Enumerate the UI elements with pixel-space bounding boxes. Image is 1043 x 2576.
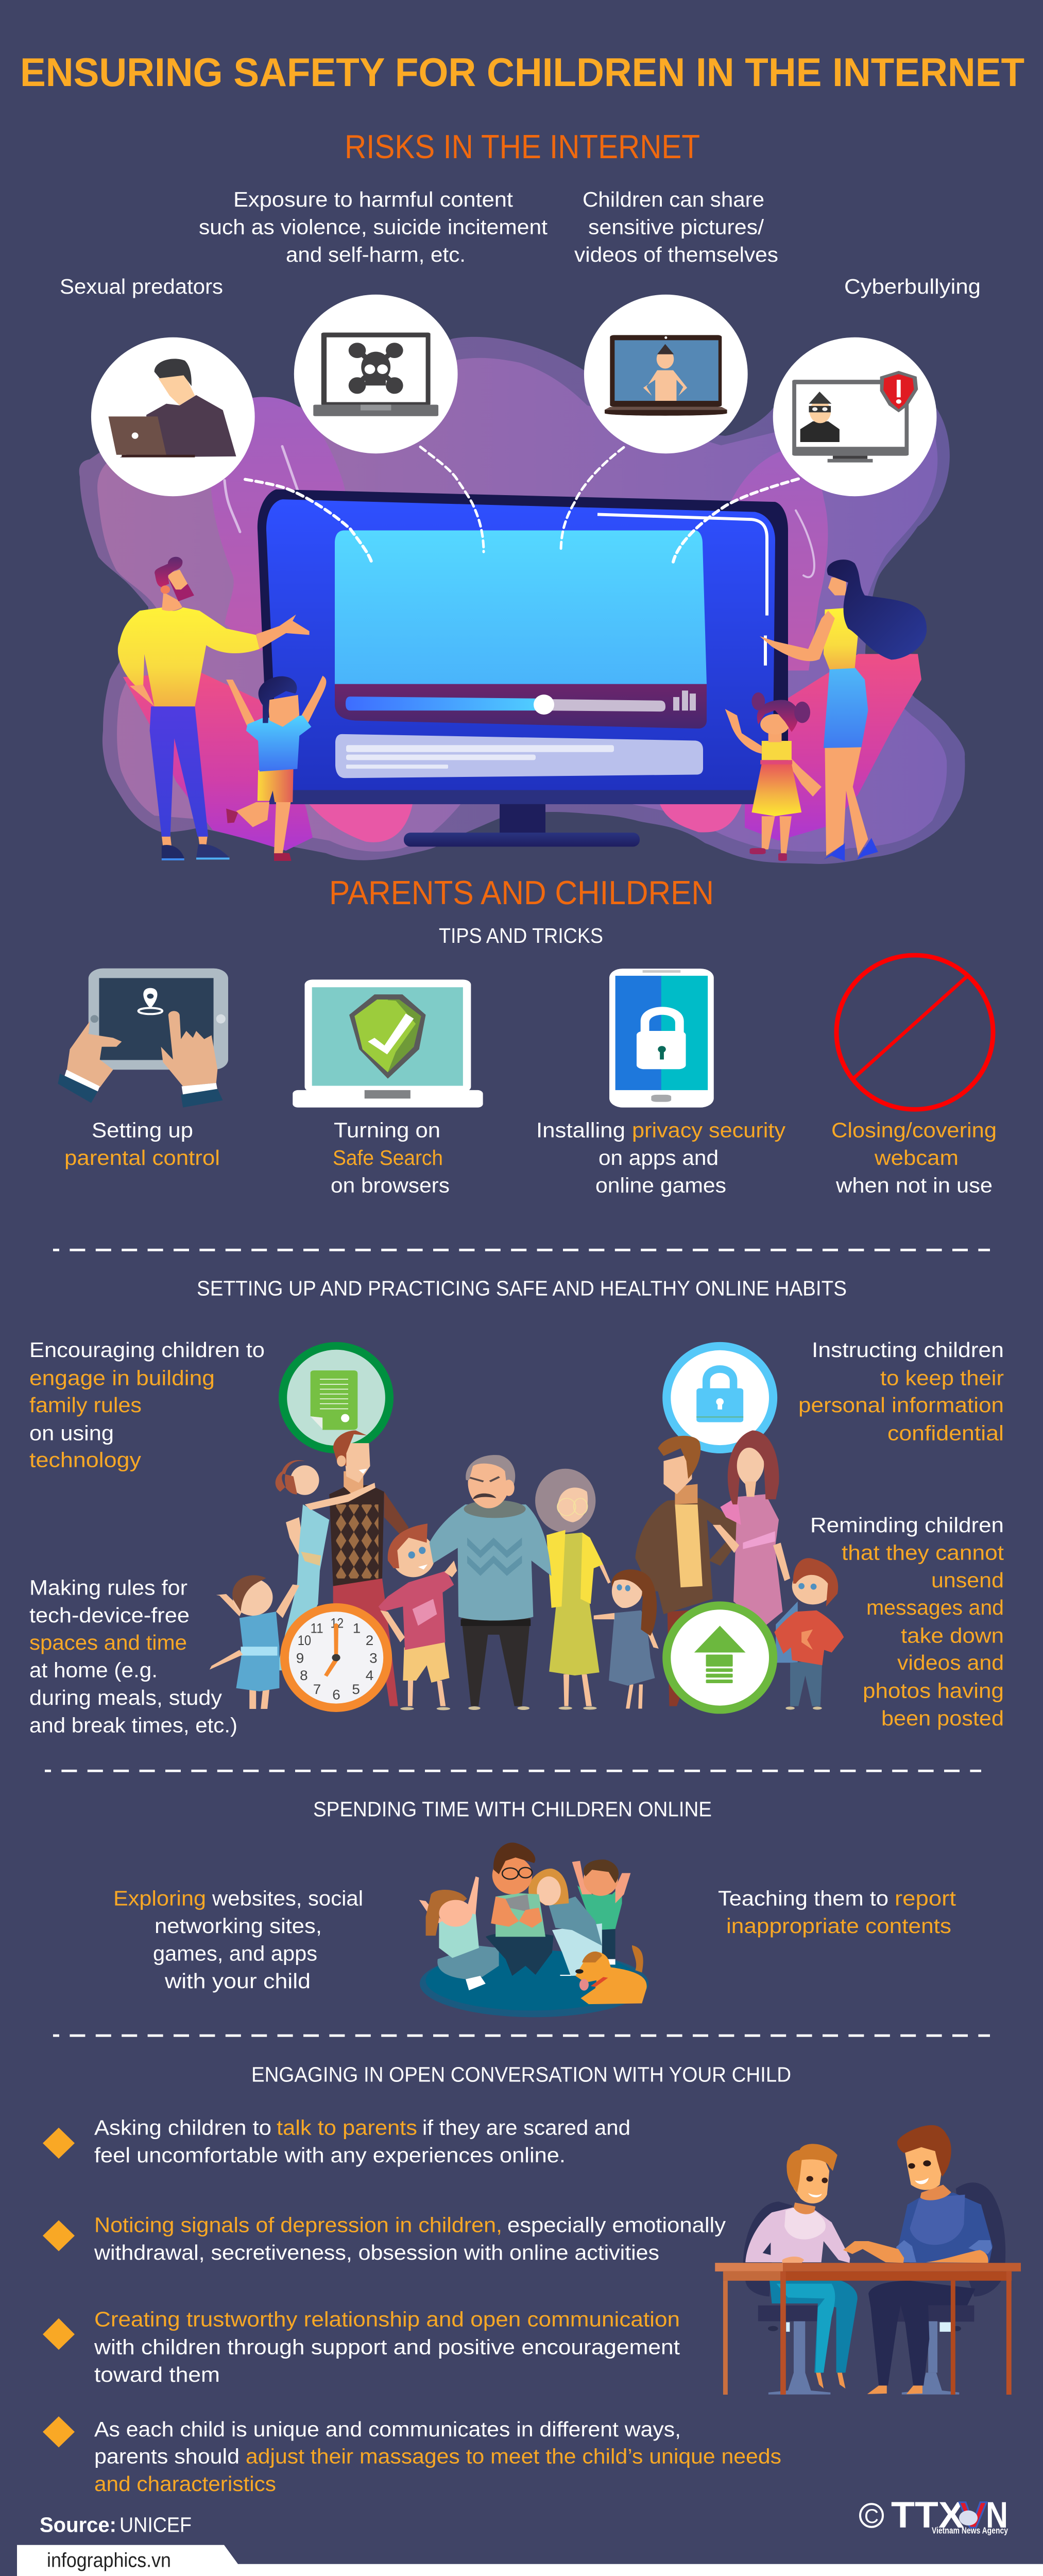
caption: privacy security — [536, 1118, 785, 1197]
chair: left — [743, 2201, 830, 2395]
text: exploring websites: websites, social — [212, 1887, 363, 1910]
video controls bar — [335, 684, 707, 728]
text: family rules: family rules — [29, 1393, 142, 1417]
caption: covering webcam: Closing/covering — [831, 1118, 997, 1142]
circle icon: predator at laptop — [91, 337, 255, 496]
caption: privacy security: privacy security — [632, 1118, 785, 1142]
figure: grandmother — [535, 1469, 611, 1710]
footer tab: infographics.vn — [17, 2545, 1043, 2576]
figure: dog — [575, 1945, 647, 2004]
text: device free spaces: spaces and time — [29, 1631, 187, 1654]
heading: open conversation: ENGAGING IN OPEN CONVERSATION WITH YOUR CHILD — [251, 2063, 791, 2086]
heading: risks in the internet: RISKS IN THE INTERNET — [345, 128, 700, 165]
icon: green upload badge — [662, 1601, 777, 1714]
text: cannot unsend: take down — [901, 1624, 1004, 1647]
tip: signals of depression: withdrawal, secretiveness, obsession with online activities — [94, 2241, 659, 2264]
circle icon: skull on laptop — [294, 295, 458, 453]
figure: girl with phone — [528, 1869, 602, 1976]
monitor base — [404, 833, 640, 846]
tip: trustworthy relationship — [43, 2308, 680, 2386]
circle icon: child on webcam laptop — [584, 295, 748, 453]
icon: clock: 7 — [313, 1681, 321, 1697]
copyright mark — [860, 2504, 883, 2528]
progress slider — [346, 690, 696, 715]
caption: privacy security: on apps and — [599, 1146, 719, 1170]
agency wordmark: TTX — [891, 2495, 964, 2536]
caption: children can share: Children can share — [583, 188, 764, 211]
circle icon: cyberbully with warning shield — [773, 337, 936, 496]
logo: TTXVN — [860, 2495, 1008, 2536]
monitor bezel — [258, 489, 788, 804]
tip: signals of depression: especially emotionally — [507, 2213, 726, 2237]
tip: talk to parents: talk to parents — [277, 2116, 417, 2139]
illustration: parent and child at a desk — [715, 2125, 1021, 2395]
figure: boy in pink shirt — [379, 1523, 457, 1710]
caption: safe search: Safe Search — [333, 1146, 443, 1170]
copyright mark: C — [864, 2505, 879, 2528]
illustration: family in front of a big screen — [79, 337, 965, 864]
figure: child in pink top — [745, 2144, 858, 2388]
text: personal information: personal information — [798, 1393, 1004, 1417]
caption: exposure to harmful content: and self-harm, etc. — [286, 243, 466, 266]
caption: safe search — [331, 1118, 450, 1197]
figure: father with glasses and tablet — [486, 1842, 554, 1976]
conversation tips list — [43, 2116, 781, 2496]
text: report inappropriate contents — [718, 1887, 956, 1938]
figure: boy in red sweater — [774, 1558, 844, 1710]
source line: Source: — [40, 2513, 116, 2536]
source line — [40, 2513, 192, 2536]
monitor screen — [266, 499, 775, 790]
tips captions — [64, 1118, 997, 1197]
tip: trustworthy relationship: with children through support and positive encouragement — [94, 2335, 680, 2359]
dashed connector lines — [245, 447, 798, 562]
screen highlight — [597, 514, 767, 666]
tip: signals of depression: Noticing signals of depression in children, — [94, 2213, 502, 2237]
text: personal information: confidential — [887, 1421, 1004, 1445]
desk — [715, 2263, 1021, 2395]
icon: blue padlock badge — [662, 1342, 777, 1453]
text: cannot unsend: videos and — [897, 1651, 1004, 1674]
illustration: extended family with icons — [210, 1342, 844, 1714]
text: report inappropriate contents: report — [895, 1887, 956, 1910]
tip: adjust messages: and characteristics — [94, 2472, 276, 2496]
agency wordmark: Vietnam News Agency — [932, 2526, 1008, 2535]
text: report inappropriate contents: Teaching them to — [718, 1887, 888, 1910]
caption: cyberbullying: Cyberbullying — [844, 275, 981, 298]
icon: laptop with safe search shield — [293, 979, 483, 1108]
video panel — [335, 531, 707, 684]
icon: clock: 3 — [369, 1650, 378, 1666]
agency wordmark: V — [959, 2495, 987, 2536]
icon: clock: 4 — [366, 1667, 373, 1683]
tip: adjust messages: adjust their massages to meet the child’s unique needs — [246, 2445, 781, 2468]
text: exploring websites: networking sites, — [155, 1914, 322, 1938]
text: device free spaces: during meals, study — [29, 1686, 222, 1709]
tip: talk to parents: Asking children to — [94, 2116, 271, 2139]
caption: privacy security: online games — [595, 1174, 726, 1197]
figure: woman in pink dress — [713, 1430, 790, 1627]
heading: online habits: SETTING UP AND PRACTICING SAFE AND HEALTHY ONLINE HABITS — [197, 1277, 847, 1300]
text: device free spaces: at home (e.g. — [29, 1658, 158, 1682]
tip: signals of depression — [43, 2213, 726, 2264]
figure: parent in blue top — [843, 2125, 993, 2394]
footer tab: infographics.vn: infographics.vn — [47, 2549, 171, 2571]
illustration: family and dog on a rug — [419, 1842, 648, 2017]
caption: children can share — [574, 188, 778, 266]
figure: grandfather — [430, 1455, 552, 1710]
caption: exposure to harmful content — [199, 188, 548, 266]
tip: talk to parents: if they are scared and — [422, 2116, 630, 2139]
text: cannot unsend: Reminding children — [810, 1514, 1004, 1537]
habit text blocks — [29, 1338, 1004, 1737]
text: personal information: Instructing children — [812, 1338, 1004, 1362]
text: cannot unsend — [810, 1514, 1004, 1730]
caption: parental control: parental control — [64, 1146, 220, 1170]
text: family rules: technology — [29, 1448, 141, 1472]
tip: adjust messages — [43, 2416, 781, 2496]
text: family rules — [29, 1338, 265, 1472]
figure: man in brown jacket — [635, 1436, 746, 1706]
icon: clock: 5 — [352, 1681, 360, 1697]
tip: talk to parents — [43, 2116, 630, 2167]
tip: adjust messages: parents should — [94, 2445, 240, 2468]
figure: father — [118, 557, 310, 860]
agency wordmark: N — [986, 2495, 1008, 2536]
text: cannot unsend: unsend — [931, 1568, 1004, 1592]
text: device free spaces: Making rules for — [29, 1576, 187, 1599]
text: cannot unsend: messages and — [866, 1596, 1004, 1619]
icon: clock: 6 — [332, 1687, 340, 1703]
icon: green document badge — [279, 1342, 394, 1453]
caption: safe search: Turning on — [334, 1118, 440, 1142]
icon: clock: 11 — [311, 1620, 323, 1636]
figure: girl — [725, 692, 822, 861]
source line: UNICEF — [119, 2513, 192, 2536]
caption: safe search: on browsers — [331, 1174, 450, 1197]
text: exploring websites — [113, 1887, 363, 1993]
text: device free spaces: and break times, etc.) — [29, 1714, 237, 1737]
figure: boy behind — [572, 1859, 630, 1964]
caption: covering webcam: webcam — [874, 1146, 959, 1170]
figure: father in argyle sweater — [329, 1430, 408, 1706]
figure: small girl in blue dress — [594, 1569, 659, 1709]
caption: covering webcam — [831, 1118, 997, 1197]
caption: sexual predators: Sexual predators — [60, 275, 223, 298]
description panel — [335, 734, 703, 778]
text: device free spaces: tech-device-free — [29, 1603, 190, 1627]
text: report inappropriate contents: inappropriate contents — [726, 1914, 951, 1938]
rug — [420, 1950, 648, 2017]
text: cannot unsend: been posted — [881, 1706, 1004, 1730]
heading: spending time: SPENDING TIME WITH CHILDREN ONLINE — [313, 1798, 712, 1821]
caption: children can share: sensitive pictures/ — [588, 215, 764, 239]
icon: smartphone with lock — [609, 969, 714, 1108]
icon: clock: 2 — [366, 1632, 373, 1648]
subheading: tips and tricks: TIPS AND TRICKS — [439, 924, 603, 947]
icon: clock: 10 — [298, 1632, 311, 1648]
tip: talk to parents: feel uncomfortable with any experiences online. — [94, 2143, 566, 2167]
icon: clock: 1 — [353, 1620, 361, 1636]
caption: privacy security: Installing — [536, 1118, 625, 1142]
text: family rules: engage in building — [29, 1366, 215, 1389]
tip: adjust messages: As each child is unique and communicates in different ways, — [94, 2418, 681, 2441]
icon: clock: 12 — [331, 1615, 344, 1631]
icon: no webcam prohibition sign — [836, 955, 993, 1109]
figure: little girl with raised arms — [210, 1575, 299, 1709]
monitor stand — [500, 801, 545, 835]
monitor — [258, 489, 788, 846]
text: exploring websites: Exploring — [113, 1887, 206, 1910]
icon: clock: 8 — [300, 1667, 308, 1683]
heading: parents and children: PARENTS AND CHILDREN — [329, 874, 714, 911]
icon: clock: 9 — [296, 1650, 304, 1666]
figure: boy — [226, 676, 326, 861]
agency wordmark — [891, 2495, 1008, 2536]
text: cannot unsend: that they cannot — [842, 1541, 1004, 1564]
caption: exposure to harmful content: such as violence, suicide incitement — [199, 215, 548, 239]
text: family rules: on using — [29, 1421, 114, 1445]
text: exploring websites: with your child — [164, 1969, 311, 1993]
text: cannot unsend: photos having — [863, 1679, 1004, 1702]
icon: tablet with hands — [58, 969, 228, 1108]
tip: trustworthy relationship: toward them — [94, 2363, 220, 2386]
caption: exposure to harmful content: Exposure to harmful content — [233, 188, 514, 211]
text: exploring websites: games, and apps — [153, 1942, 317, 1965]
caption: parental control: Setting up — [92, 1118, 193, 1142]
caption: children can share: videos of themselves — [574, 243, 778, 266]
chair: right — [896, 2182, 1005, 2395]
figure: woman in blue dress — [276, 1460, 375, 1670]
figure: child cheering left — [419, 1876, 499, 1990]
text: family rules: Encouraging children to — [29, 1338, 265, 1362]
caption: covering webcam: when not in use — [835, 1174, 993, 1197]
caption: parental control — [64, 1118, 220, 1170]
text: personal information: to keep their — [880, 1366, 1004, 1389]
background blobs — [79, 337, 965, 864]
risks captions — [60, 188, 981, 298]
tip: trustworthy relationship: Creating trustworthy relationship and open communication — [94, 2308, 680, 2331]
figure: mother — [760, 560, 927, 861]
text: device free spaces — [29, 1576, 237, 1737]
icon: clock — [280, 1603, 392, 1712]
text: personal information — [798, 1338, 1004, 1445]
